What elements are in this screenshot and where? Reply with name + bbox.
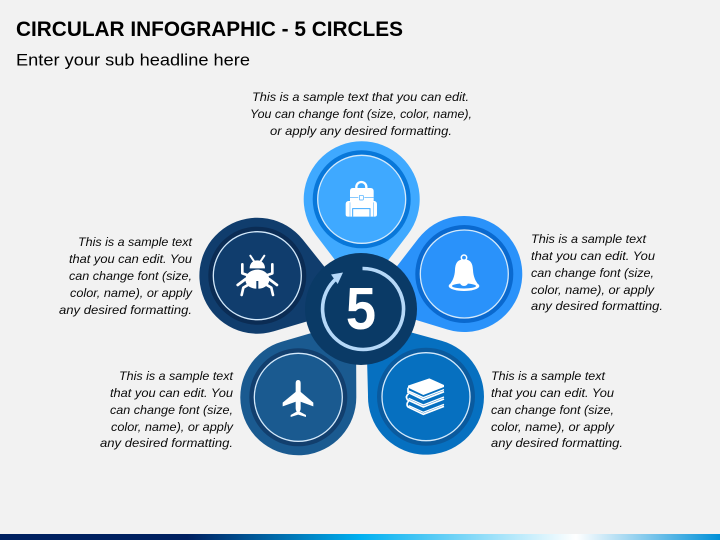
petal: top backpack <box>304 141 420 295</box>
petal: left bug <box>199 218 356 334</box>
text block: left <box>59 235 193 317</box>
text block: right: that you can edit. You <box>531 249 655 263</box>
text block: right: any desired formatting. <box>531 299 663 313</box>
text block: bottom right: that you can edit. You <box>491 386 614 400</box>
title: CIRCULAR INFOGRAPHIC - 5 CIRCLES <box>16 18 403 41</box>
number 5: 5 <box>346 277 376 343</box>
icon: bell <box>449 255 479 291</box>
text block: right <box>531 232 663 313</box>
text block: left: can change font (size, <box>69 269 192 283</box>
text block: left: This is a sample text <box>78 235 193 249</box>
petal: bottom right books <box>366 320 484 455</box>
progress ring <box>323 268 404 349</box>
text block: bottom left: any desired formatting. <box>100 436 233 450</box>
petal: bottom left plane <box>240 320 356 455</box>
icon: plane <box>283 380 313 417</box>
icon: books <box>406 378 444 414</box>
text block: bottom right: This is a sample text <box>491 369 606 383</box>
text block: right: color, name), or apply <box>531 283 655 297</box>
icon: bug <box>238 256 277 295</box>
text block: top <box>250 90 472 138</box>
text block: bottom left: color, name), or apply <box>111 420 234 434</box>
text block: bottom right <box>491 369 623 450</box>
center circle <box>305 253 417 365</box>
petal: right bell <box>367 216 522 332</box>
text block: bottom left: This is a sample text <box>119 369 234 383</box>
subtitle: Enter your sub headline here <box>16 50 250 70</box>
text block: left: color, name), or apply <box>70 286 193 300</box>
text block: left: any desired formatting. <box>59 303 192 317</box>
text block: bottom left: that you can edit. You <box>110 386 233 400</box>
text block: top: or apply any desired formatting. <box>270 124 452 138</box>
arrowhead <box>331 272 343 284</box>
text block: bottom right: color, name), or apply <box>491 420 615 434</box>
bottom gradient bar <box>0 534 720 540</box>
text block: top: This is a sample text that you can edit. <box>252 90 469 104</box>
text block: bottom left <box>100 369 234 450</box>
text block: right: can change font (size, <box>531 266 654 280</box>
text block: left: that you can edit. You <box>69 252 192 266</box>
text block: top: You can change font (size, color, name), <box>250 107 472 121</box>
text block: right: This is a sample text <box>531 232 647 246</box>
text block: bottom left: can change font (size, <box>110 403 233 417</box>
text block: bottom right: any desired formatting. <box>491 436 623 450</box>
icon: backpack <box>346 182 377 217</box>
text block: bottom right: can change font (size, <box>491 403 614 417</box>
